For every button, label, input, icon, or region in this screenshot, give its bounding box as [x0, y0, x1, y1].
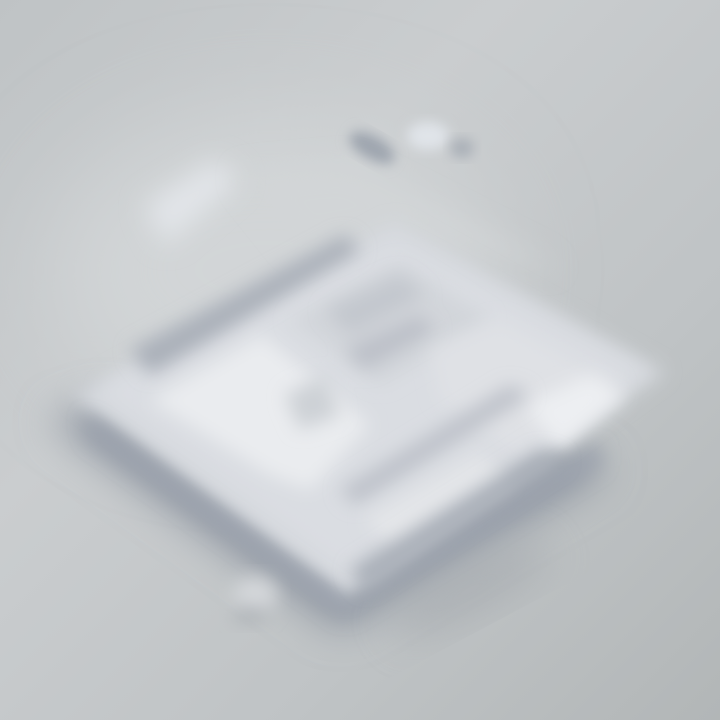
- cast shadow: [50, 400, 610, 630]
- upper-left dark fold: [130, 235, 360, 375]
- faint trailing sheet: [240, 165, 560, 270]
- edge under bottom strip: [350, 450, 565, 590]
- dark lower edge: [85, 415, 600, 618]
- panel: bottom strip: [365, 455, 510, 550]
- mark: light smudge: [407, 122, 449, 150]
- panel: centre page: [290, 262, 490, 385]
- stack top sheet: [100, 240, 640, 570]
- background glow: [50, 120, 490, 420]
- panel: left page: [150, 335, 370, 490]
- small round object: [232, 577, 277, 620]
- panel: page details: [285, 275, 435, 430]
- panel: right page: [430, 320, 620, 455]
- mark: dark smudge: [344, 125, 400, 171]
- stack base: [72, 222, 665, 600]
- panel: bright corner: [525, 375, 625, 450]
- soft shadow lower right: [380, 528, 560, 652]
- floating card: left: [145, 160, 240, 245]
- mark: small smudge: [450, 138, 474, 158]
- document stack: [72, 222, 665, 618]
- inner divider: [340, 385, 530, 505]
- floating marks: top: [344, 122, 474, 171]
